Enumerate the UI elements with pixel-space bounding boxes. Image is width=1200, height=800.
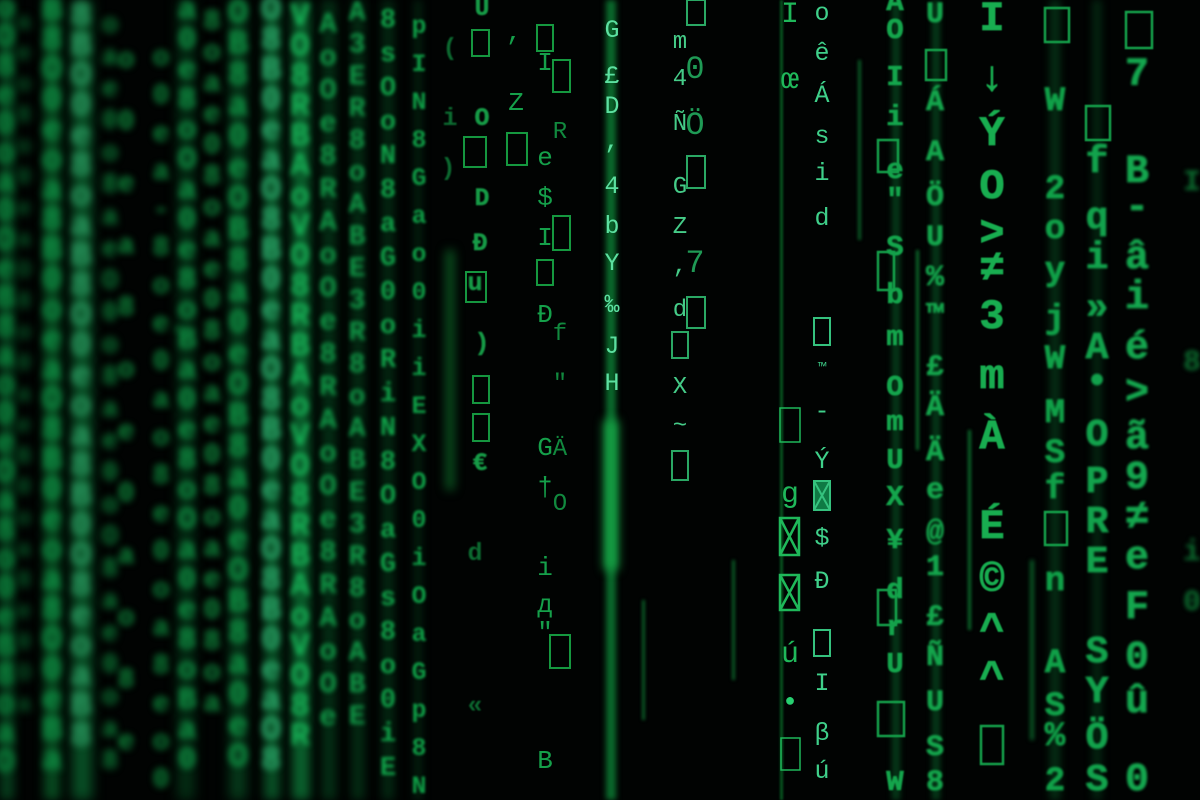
empty glyph boxes, column 545 bbox=[507, 25, 570, 668]
blurred code columns, left side: VO8RBAoVO8RBAoVO8RBAoVO8R bbox=[290, 0, 310, 755]
column at x 1055: W2oyjWMSfnAS%2 bbox=[1045, 83, 1066, 800]
blurred code columns, left side: o0ea-8oe.0ao8e0oa8eo0 bbox=[152, 43, 186, 796]
blurred code columns, left side: 8BO0e8oaB8O0eoa8B0O8eoaB8 bbox=[71, 0, 91, 756]
blurred code columns, left side: pIN8Gao0iiEXO0iOaGp8N bbox=[411, 12, 426, 800]
boxes, column 822 bbox=[814, 318, 830, 656]
column at x 450-480: UODĐu)€ bbox=[467, 0, 490, 478]
blurred code columns, left side: oae0o8aeO0o8ae0oO8ae0oa8 bbox=[102, 11, 118, 777]
empty glyph boxes, column 475 bbox=[464, 30, 489, 441]
blurred code columns, left side: o0ea8oe0ao8e bbox=[118, 45, 134, 758]
column at x 450-480: «d bbox=[467, 539, 483, 720]
column at x 450-480: (i) bbox=[440, 34, 458, 183]
column at x 680-695 bbox=[673, 29, 705, 440]
crossed boxes, column 790 bbox=[780, 408, 800, 770]
column at x 510-570: Rf"ÄO bbox=[553, 119, 568, 518]
column at x 822: oêÁsid-Ý$ĐIβú bbox=[814, 0, 830, 786]
blurred code columns, left side: OB8a0eOB8a0eOB8a0eOB8a0eO bbox=[228, 0, 248, 776]
column at x 790: Iœgú bbox=[781, 0, 799, 672]
column at x 992: I↓ÝO>≠3mÀÉ©^^ bbox=[979, 0, 1005, 703]
column at x 1097: fqi»A•OPRESYÖS bbox=[1086, 141, 1109, 800]
blurred code columns, left side: B8O0eoa8B0oeaO8B0eoa8O0eBa bbox=[42, 0, 62, 779]
column at x 1137: 7B-âié>ã9≠eF0û0 bbox=[1125, 53, 1149, 800]
column at x 790: ● bbox=[785, 692, 795, 712]
column at x 935: UÁAÖU%™£ÄÄe@1£ÑUS8 bbox=[925, 0, 945, 800]
blurred code columns, left side: A3ER8oABE3R8oABE3R8oABE bbox=[349, 0, 365, 733]
column at x 510-570: Z,Ie$IĐG†iд"B bbox=[506, 18, 553, 776]
blurred code columns, left side: AoOe8RAoOe8RAoOe8RAoOe bbox=[319, 8, 337, 734]
column at x 895: AOIie"SbmOmUX¥drUW bbox=[886, 0, 904, 799]
right-side code columns bbox=[886, 0, 1200, 800]
bright column at x 612: G£D,4bY‰JH bbox=[604, 16, 620, 398]
blurred code columns, left side: a0e8oOa0e8oBa0e8oOa0e8oBa0 bbox=[178, 0, 196, 778]
column at x 680-695: m4ÑGZ,dX~ bbox=[673, 29, 687, 440]
blurred code columns, left side: 8sOoN8aG0oRiN8OaGs8o0iE bbox=[380, 6, 396, 784]
empty glyph boxes, column 680-695 bbox=[672, 0, 705, 480]
blurred code columns, left side: 8oae08oae08oae08oae08oa bbox=[203, 5, 221, 720]
column at x 822: ™ bbox=[818, 361, 827, 377]
column at x 680-695: 0Ö7 bbox=[685, 51, 705, 282]
blurred code columns, left side: aeo8o0eaO8o0aeB0oa8e0Oa bbox=[17, 10, 31, 719]
blurred code columns, left side: O8B0eaO8B0eaO8B0eaO8B0eaO8 bbox=[261, 0, 281, 779]
empty glyph boxes, right columns bbox=[878, 8, 1152, 764]
column at x 450-480 bbox=[440, 0, 490, 720]
